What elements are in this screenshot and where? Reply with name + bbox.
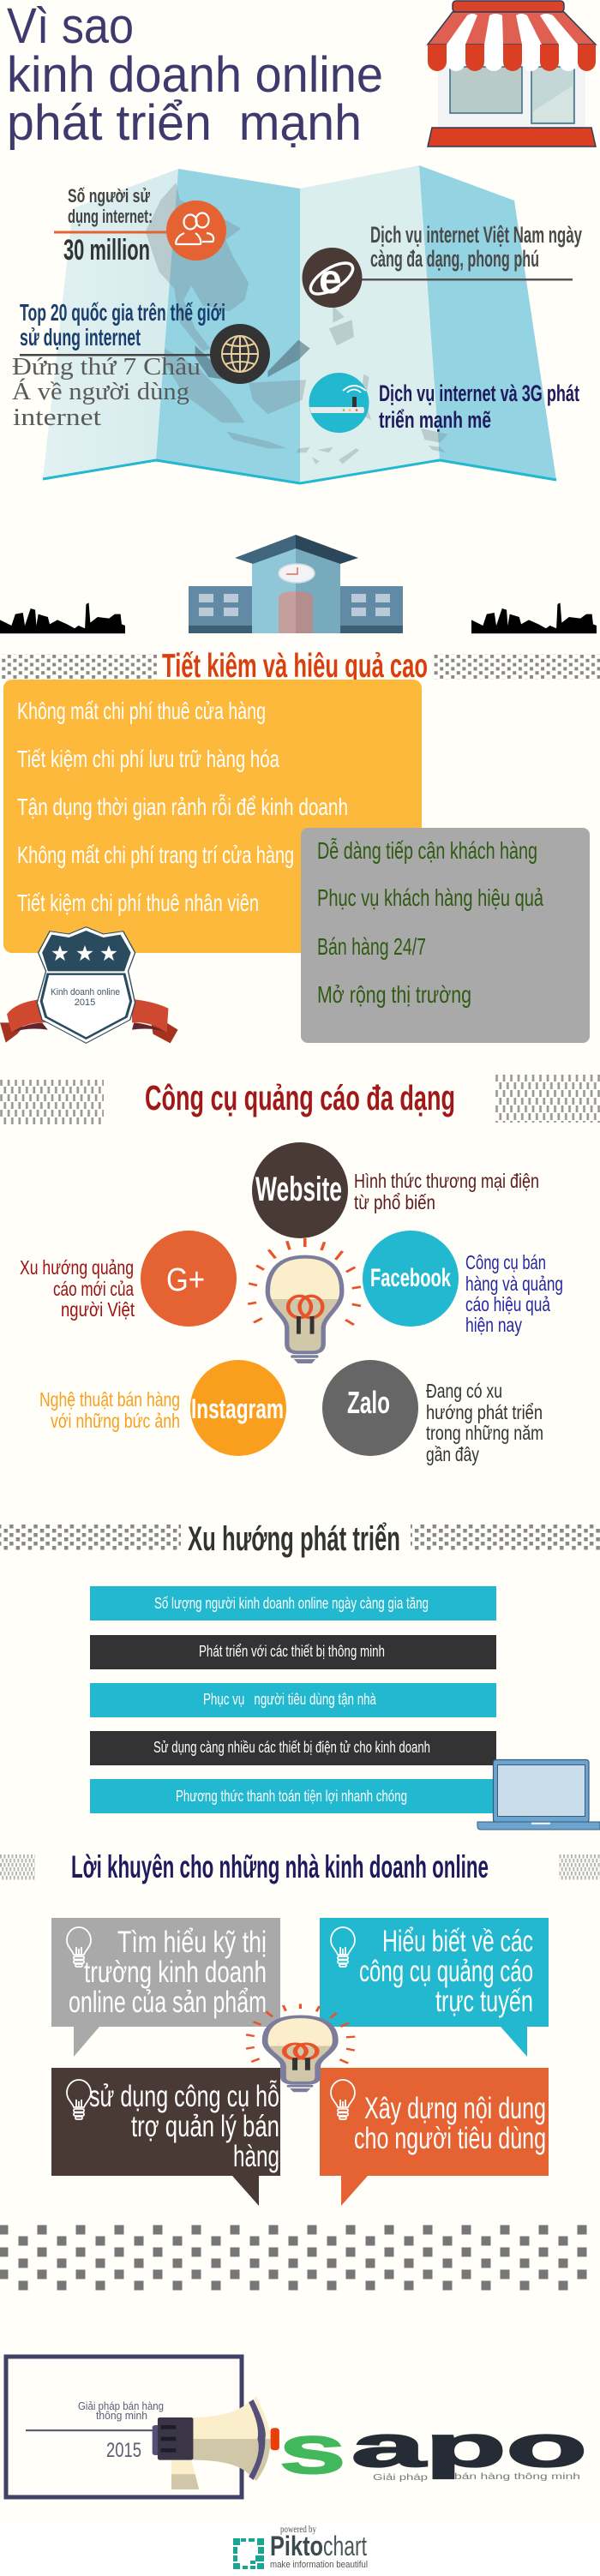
icon: bulb outline: [67, 2080, 91, 2119]
title: [7, 0, 383, 151]
node: instagram: Nghệ thuật bán hàng: [39, 1388, 180, 1411]
panel: savings list: Tiết kiệm chi phí lưu trữ hàng hóa: [17, 746, 279, 772]
icon: advice light bulb: [246, 2004, 355, 2092]
panel: footer frame: 2015: [106, 2439, 141, 2462]
node: instagram: Instagram: [191, 1393, 284, 1424]
node: zalo: trong những năm: [426, 1422, 543, 1444]
logo text: piktochart: Pikto: [270, 2531, 323, 2561]
callout: top 20 countries: internet: [13, 404, 101, 431]
icon: school building: [189, 535, 403, 633]
logo text: piktochart: make information beautiful: [270, 2560, 368, 2570]
logo: sapo: Giải pháp: [373, 2473, 429, 2483]
icon: megaphone: [153, 2397, 279, 2489]
icon: globe: [222, 336, 258, 372]
callout: internet and 3G: triển mạnh mẽ: [379, 407, 491, 433]
node: website: [252, 1142, 539, 1238]
pattern strips: section 2: [0, 1075, 600, 1125]
callout: top 20 countries: Á về người dùng: [12, 377, 189, 405]
icon: people: [176, 213, 213, 244]
panel: customer benefits: [301, 828, 590, 1043]
callout: top 20 countries: [12, 299, 270, 431]
callout: top 20 countries: Top 20 quốc gia trên thế giới: [20, 299, 225, 326]
panel: folded map: [43, 165, 556, 483]
node: zalo: Zalo: [347, 1385, 390, 1420]
node: google plus: Xu hướng quảng: [20, 1256, 134, 1279]
bar: electronic devices: Sử dụng càng nhiều các thiết bị điện tử cho kinh doanh: [153, 1739, 430, 1756]
pattern strips: section 3: [0, 1525, 600, 1550]
panel: savings list: Tận dụng thời gian rảnh rỗi để kinh doanh: [17, 794, 348, 820]
panel: savings list: [3, 680, 422, 953]
icon: internet explorer: e: [319, 257, 342, 303]
icon: wifi router: [309, 386, 366, 413]
callout: top 20 countries: Đứng thứ 7 Châu: [12, 353, 201, 380]
panel: savings list: Không mất chi phí thuê cửa hàng: [17, 698, 266, 724]
map land masses: [146, 183, 447, 464]
bar: home service: [90, 1683, 496, 1717]
callout: sales tools: trợ quản lý bán: [131, 2110, 279, 2143]
pattern strips: section 4: [0, 1854, 600, 1880]
node: facebook: [363, 1231, 563, 1336]
bar: growing number of sellers: [90, 1586, 496, 1620]
icon: laptop: [477, 1760, 600, 1830]
callout: ad tools: [320, 1918, 549, 2057]
callout: market research: trường kinh doanh: [84, 1956, 267, 1989]
callout: internet users: [54, 185, 226, 267]
node: facebook: hàng và quảng: [465, 1273, 563, 1295]
bar: payment methods: [90, 1779, 496, 1813]
attribution: powered by: powered by: [280, 2523, 316, 2535]
logo text: piktochart: chart: [323, 2531, 367, 2561]
callout: sales tools: hàng: [233, 2140, 279, 2173]
pattern strips: section 1: [0, 654, 600, 680]
heading: development trends: Xu hướng phát triển: [188, 1520, 400, 1558]
icon: badge with ribbon: 2015: [75, 997, 95, 1008]
logo: sapo: bán hàng thông minh: [454, 2472, 580, 2482]
bar: electronic devices: [90, 1731, 496, 1765]
logo: sapo: apo: [351, 2414, 587, 2479]
panel: customer benefits: Mở rộng thị trường: [317, 981, 471, 1008]
panel: footer frame: [6, 2357, 242, 2497]
node: google plus: người Việt: [61, 1298, 135, 1321]
bar: smart devices: [90, 1635, 496, 1669]
node: zalo: hướng phát triển: [426, 1401, 543, 1423]
panel: footer frame: Giải pháp bán hàng: [78, 2399, 164, 2412]
node: facebook: cáo hiệu quả: [465, 1293, 550, 1315]
node: facebook: Facebook: [370, 1264, 451, 1292]
node: zalo: gần đây: [426, 1443, 479, 1465]
icon: skyline right: [471, 602, 597, 633]
callout: internet users: dụng internet:: [68, 206, 153, 227]
node: google plus: G+: [166, 1262, 205, 1298]
callout: internet users: Số người sử: [68, 185, 150, 207]
callout: ad tools: Hiểu biết về các: [382, 1925, 533, 1958]
callout: ad tools: trực tuyến: [435, 1985, 533, 2018]
logo: sapo: [279, 2411, 587, 2488]
node: facebook: Công cụ bán: [465, 1251, 546, 1273]
icon: badge with ribbon: [0, 927, 178, 1043]
heading: savings and efficiency: Tiết kiệm và hiệu quả cao: [162, 648, 428, 685]
callout: top 20 countries: sử dụng internet: [20, 324, 141, 350]
callout: internet services diverse: [302, 222, 582, 308]
icon: central light bulb: [248, 1238, 361, 1363]
panel: savings list: Tiết kiệm chi phí thuê nhân viên: [17, 890, 259, 916]
bar: payment methods: Phương thức thanh toán tiện lợi nhanh chóng: [176, 1788, 407, 1805]
callout: market research: online của sản phẩm: [69, 1986, 267, 2019]
icon: bulb outline: [331, 1927, 355, 1967]
node: zalo: Đang có xu: [426, 1380, 502, 1402]
callout: sales tools: sử dụng công cụ hỗ: [89, 2080, 279, 2113]
icon: piktochart logo: [233, 2538, 264, 2569]
title: phát triển mạnh: [7, 95, 362, 151]
callout: internet and 3G: [309, 373, 579, 433]
node: website: từ phổ biến: [354, 1191, 435, 1213]
node: website: Hình thức thương mại điện: [354, 1170, 539, 1192]
icon: badge with ribbon: Kinh doanh online: [51, 987, 120, 997]
icon: internet explorer: [306, 257, 357, 303]
callout: internet users: 30 million: [63, 234, 150, 267]
icon: bulb outline: [67, 1927, 91, 1967]
callout: content: [320, 2068, 549, 2206]
icon: skyline left: [0, 602, 125, 633]
icon: bulb outline: [331, 2080, 355, 2119]
node: facebook: hiện nay: [465, 1314, 522, 1336]
logo text: piktochart: [270, 2531, 368, 2570]
callout: market research: Tìm hiểu kỹ thị: [117, 1926, 267, 1959]
callout: market research: [51, 1918, 280, 2057]
bar: smart devices: Phát triển với các thiết bị thông minh: [199, 1643, 385, 1660]
panel: savings list: Không mất chi phí trang trí cửa hàng: [17, 842, 294, 868]
logo: sapo: s: [279, 2411, 346, 2488]
bar: growing number of sellers: Số lượng người kinh doanh online ngày càng gia tăng: [154, 1595, 429, 1612]
pattern: gray squares: [0, 2225, 591, 2291]
node: google plus: [20, 1231, 237, 1327]
node: instagram: với những bức ảnh: [51, 1410, 180, 1432]
node: website: Website: [255, 1171, 342, 1208]
node: google plus: cáo mới của: [53, 1278, 134, 1300]
icon: storefront: [428, 1, 596, 147]
title: kinh doanh online: [7, 47, 383, 103]
panel: customer benefits: Bán hàng 24/7: [317, 933, 426, 960]
panel: footer frame: thông minh: [96, 2409, 147, 2422]
callout: sales tools: [51, 2068, 280, 2206]
bar: home service: Phục vụ người tiêu dùng tận nhà: [203, 1691, 377, 1708]
node: zalo: [322, 1360, 543, 1465]
node: instagram: [39, 1360, 286, 1456]
